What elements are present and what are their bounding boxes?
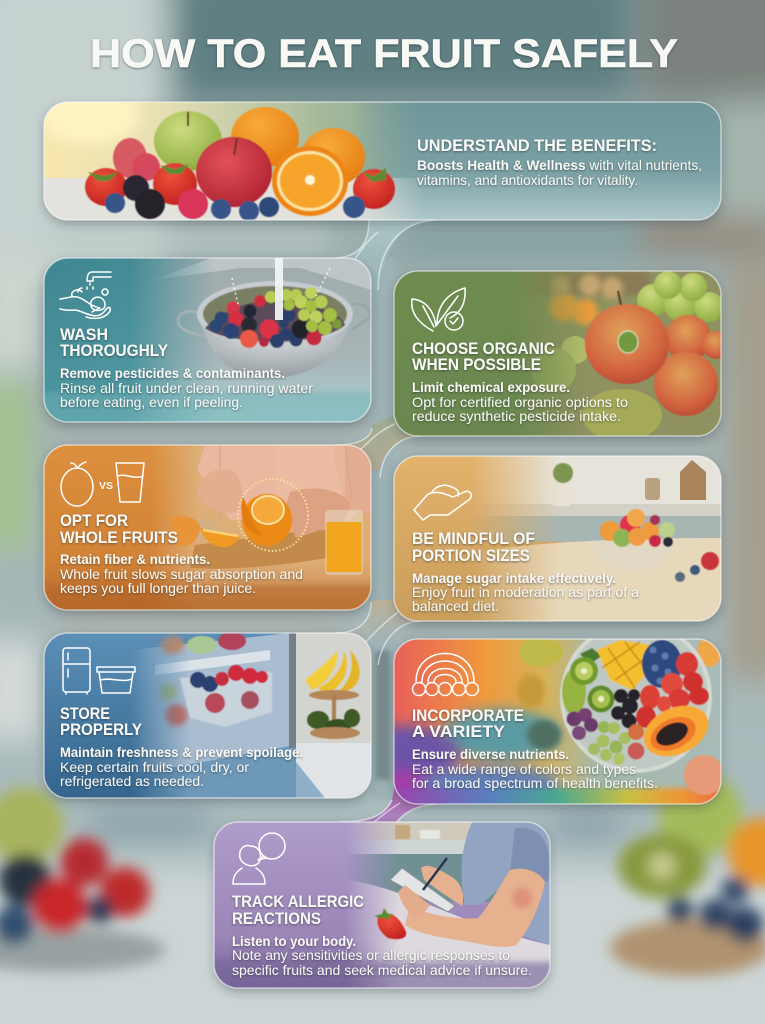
text: incorporate a variety: A VARIETY (412, 722, 506, 741)
text: track allergic reactions: TRACK ALLERGIC (232, 892, 364, 911)
panel: understand the benefits (40, 85, 721, 221)
icon: faucet and hand washing fruit (60, 272, 111, 318)
panel: be mindful of portion sizes (394, 456, 721, 621)
text: store properly: STORE (60, 704, 110, 723)
panel: store properly (44, 632, 371, 798)
panel: incorporate a variety (389, 638, 726, 814)
icon: fridge and storage container (63, 648, 135, 694)
text: store properly (60, 704, 303, 789)
text: store properly: Maintain freshness & prevent spoilage. (60, 744, 303, 760)
text: store properly: Keep certain fruits cool, dry, or (60, 759, 249, 775)
photo: person noting a reaction on a notepad (232, 822, 550, 988)
text: track allergic reactions: specific fruits and seek medical advice if unsure. (232, 962, 532, 978)
text: track allergic reactions: Listen to your body. (232, 933, 356, 949)
text: incorporate a variety (412, 706, 658, 791)
title: HOW TO EAT FRUIT SAFELY (90, 32, 678, 76)
photo: pile of mixed fruit (44, 102, 418, 220)
panel: wash thoroughly (30, 258, 385, 432)
panel background (44, 102, 721, 220)
text: wash thoroughly: THOROUGHLY (60, 341, 169, 360)
text: wash thoroughly: Rinse all fruit under clean, running water (60, 380, 313, 396)
text: choose organic: reduce synthetic pesticide intake. (412, 408, 621, 424)
text: understand the benefits: UNDERSTAND THE BENEFITS: (417, 136, 657, 155)
panel background (394, 456, 721, 621)
photo: colander under running water (44, 258, 371, 422)
text: understand the benefits: Boosts Health & Wellness with vital nutrients, (417, 157, 702, 173)
text: store properly: PROPERLY (60, 720, 143, 739)
text: wash thoroughly: before eating, even if peeling. (60, 394, 243, 410)
panel background (44, 258, 371, 422)
panel background (44, 633, 371, 798)
icon: leaf with check mark (412, 288, 465, 331)
photo: fruit salad bowl on kitchen counter (470, 456, 721, 621)
text: be mindful of portion sizes: BE MINDFUL OF (412, 529, 535, 548)
text: be mindful of portion sizes: PORTION SIZES (412, 546, 530, 565)
text: choose organic: WHEN POSSIBLE (412, 355, 541, 374)
panel: choose organic (394, 271, 730, 441)
text: wash thoroughly: Remove pesticides & contaminants. (60, 365, 285, 381)
panel background (44, 445, 371, 610)
icon: person with speech bubble (233, 833, 285, 884)
text: incorporate a variety: INCORPORATE (412, 706, 524, 725)
panel: opt for whole fruits (30, 445, 385, 625)
text: opt for whole fruits (60, 511, 303, 596)
icon: rainbow over fruits (412, 654, 478, 696)
panel background (214, 822, 550, 988)
text: opt for whole fruits: Retain fiber & nutrients. (60, 551, 210, 567)
text: be mindful of portion sizes: balanced diet. (412, 598, 499, 614)
icon: hand holding a portion (414, 485, 471, 520)
text: choose organic (412, 339, 628, 424)
text: choose organic: Opt for certified organic options to (412, 394, 628, 410)
photo: open fridge with berry basket, bananas and avocados (130, 632, 371, 798)
text: be mindful of portion sizes (412, 529, 639, 614)
text: store properly: refrigerated as needed. (60, 773, 204, 789)
icon: whole orange versus glass of juice (61, 462, 144, 506)
text: be mindful of portion sizes: Enjoy fruit in moderation as part of a (412, 584, 639, 600)
text: incorporate a variety: Ensure diverse nutrients. (412, 746, 569, 762)
text: track allergic reactions (232, 892, 532, 978)
text: opt for whole fruits: OPT FOR (60, 511, 128, 530)
text: choose organic: CHOOSE ORGANIC (412, 339, 555, 358)
photo: rainbow fruit platter (394, 639, 721, 804)
text: understand the benefits (417, 136, 702, 188)
flowing connectors between panels (335, 219, 436, 862)
text: opt for whole fruits: keeps you full longer than juice. (60, 580, 256, 596)
text: track allergic reactions: REACTIONS (232, 909, 321, 928)
photo: market apples with organic sticker (528, 271, 721, 436)
text: choose organic: Limit chemical exposure. (412, 379, 570, 395)
icon label: vs: VS (99, 481, 113, 492)
text: wash thoroughly (60, 325, 313, 410)
photo: hands peeling an orange beside juice (157, 445, 371, 610)
text: track allergic reactions: Note any sensitivities or allergic responses to (232, 947, 510, 963)
panel background (394, 271, 721, 436)
text: opt for whole fruits: WHOLE FRUITS (60, 528, 178, 547)
text: incorporate a variety: for a broad spectrum of health benefits. (412, 775, 658, 791)
text: understand the benefits: vitamins, and antioxidants for vitality. (417, 172, 638, 188)
text: wash thoroughly: WASH (60, 325, 108, 344)
text: incorporate a variety: Eat a wide range of colors and types (412, 761, 636, 777)
panel background (394, 639, 721, 804)
text: be mindful of portion sizes: Manage sugar intake effectively. (412, 570, 616, 586)
panel: track allergic reactions (200, 822, 564, 1002)
text: opt for whole fruits: Whole fruit slows sugar absorption and (60, 566, 303, 582)
